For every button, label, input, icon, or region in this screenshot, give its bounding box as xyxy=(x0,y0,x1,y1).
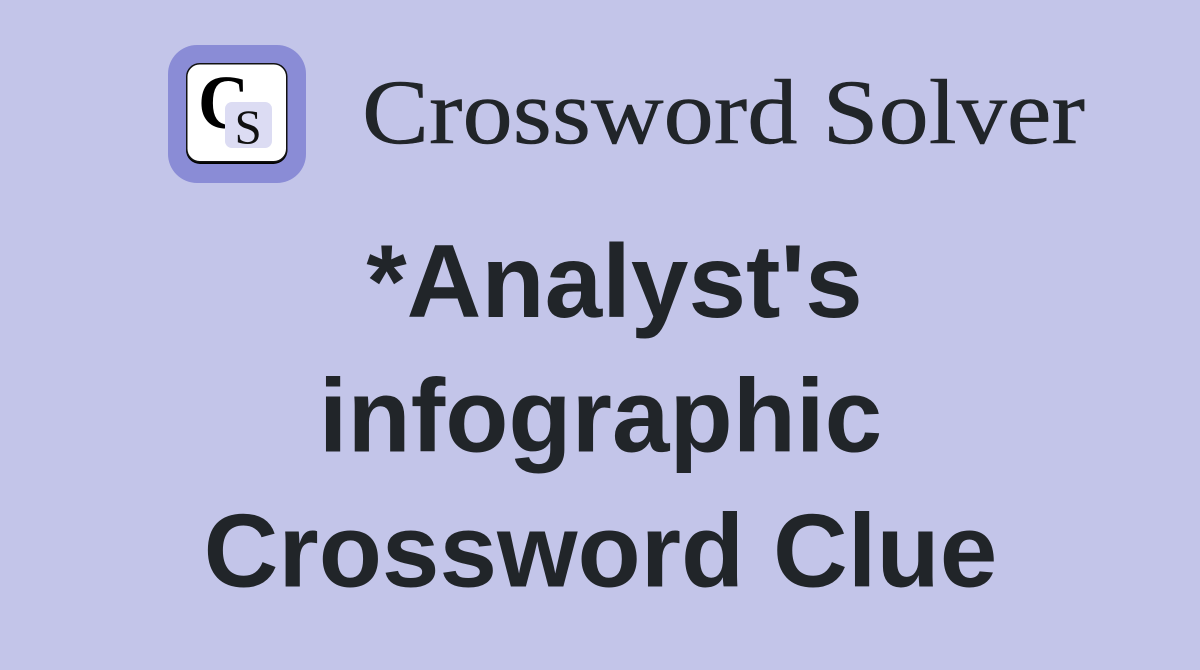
brand name: Crossword Solver xyxy=(362,61,1085,163)
title: infographic xyxy=(319,358,882,474)
icon: crossword solver logo xyxy=(168,45,306,183)
icon: crossword solver logo: S xyxy=(234,100,262,154)
title xyxy=(204,223,997,608)
icon: crossword solver logo: C xyxy=(198,61,249,145)
title: *Analyst's xyxy=(366,223,863,339)
title: Crossword Clue xyxy=(204,492,997,608)
